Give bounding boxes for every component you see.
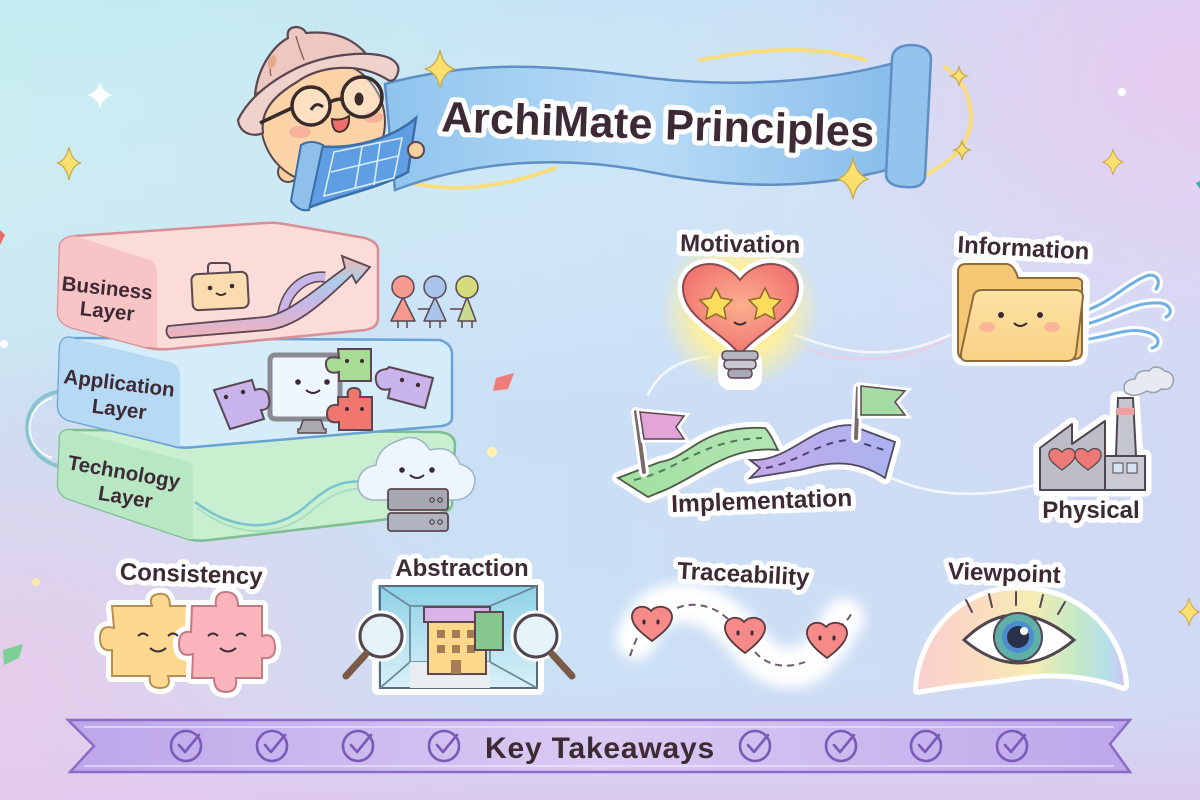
sticker: implementation xyxy=(618,386,905,518)
label: Implementation xyxy=(671,485,853,518)
ribbon text: Key Takeaways xyxy=(485,732,715,765)
business layer xyxy=(58,223,378,349)
dashed trail xyxy=(630,605,853,666)
eye xyxy=(964,615,1074,663)
folder xyxy=(958,264,1084,360)
green board xyxy=(475,612,503,650)
ribbon body xyxy=(385,60,905,190)
magnifiers xyxy=(359,614,403,658)
blueprint xyxy=(308,118,416,208)
puzzle pink xyxy=(179,592,275,692)
title banner xyxy=(385,45,971,199)
stars xyxy=(700,288,781,319)
white backing xyxy=(636,602,844,668)
smoke xyxy=(1124,367,1173,395)
sticker: consistency xyxy=(100,559,275,692)
sticker: physical xyxy=(1040,367,1173,524)
mascot with blueprint xyxy=(238,27,424,210)
decorative sparkles xyxy=(0,82,1200,665)
roads xyxy=(618,428,778,497)
application layer xyxy=(58,338,452,448)
flags xyxy=(636,388,858,472)
head xyxy=(261,60,385,184)
building xyxy=(428,620,486,674)
sticker: information xyxy=(957,232,1170,361)
factory xyxy=(1040,398,1145,490)
cheeks xyxy=(289,126,311,138)
people trio xyxy=(391,276,478,328)
label: Information xyxy=(957,232,1090,265)
rainbow arrow xyxy=(282,277,325,318)
check icons xyxy=(171,731,1027,761)
puzzle yellow xyxy=(100,594,194,688)
heart bulb xyxy=(683,264,798,355)
label: Abstraction xyxy=(395,555,529,582)
golden swirl xyxy=(400,50,971,188)
cloud and server xyxy=(358,438,475,531)
technology layer xyxy=(58,430,455,541)
helmet brim xyxy=(238,54,398,135)
application layer: Application xyxy=(62,365,176,402)
label: Viewpoint xyxy=(947,558,1061,589)
sticker: viewpoint xyxy=(918,558,1124,690)
hearts xyxy=(632,607,672,641)
wind lines xyxy=(1080,275,1170,348)
label: Traceability xyxy=(677,558,811,591)
wire loop xyxy=(27,392,58,466)
label: Motivation xyxy=(680,230,800,259)
hands xyxy=(278,162,298,182)
connectors xyxy=(648,335,1035,494)
technology layer: Layer xyxy=(97,482,154,513)
business layer: Business xyxy=(61,272,154,305)
puzzle pieces xyxy=(214,380,269,429)
helmet dome xyxy=(255,27,387,95)
label: Physical xyxy=(1042,497,1140,524)
banner title: ArchiMate Principles xyxy=(441,93,875,157)
key takeaways ribbon xyxy=(68,720,1130,772)
rainbow dome xyxy=(918,590,1124,690)
eyelashes xyxy=(966,592,1065,614)
technology layer: Technology xyxy=(66,451,182,494)
glow xyxy=(660,230,820,390)
monitor xyxy=(270,355,340,419)
briefcase xyxy=(191,272,249,310)
business layer: Layer xyxy=(79,297,136,326)
panel: layer stack xyxy=(27,223,478,541)
sticker: motivation xyxy=(660,230,820,390)
smile xyxy=(332,116,349,132)
sticker: abstraction xyxy=(346,555,572,689)
sparkle stars xyxy=(425,50,970,199)
application layer: Layer xyxy=(91,395,148,424)
label: Consistency xyxy=(119,559,264,591)
frame xyxy=(378,585,538,689)
sticker: traceability xyxy=(630,558,853,668)
glasses xyxy=(292,87,330,125)
right roller xyxy=(886,45,931,187)
